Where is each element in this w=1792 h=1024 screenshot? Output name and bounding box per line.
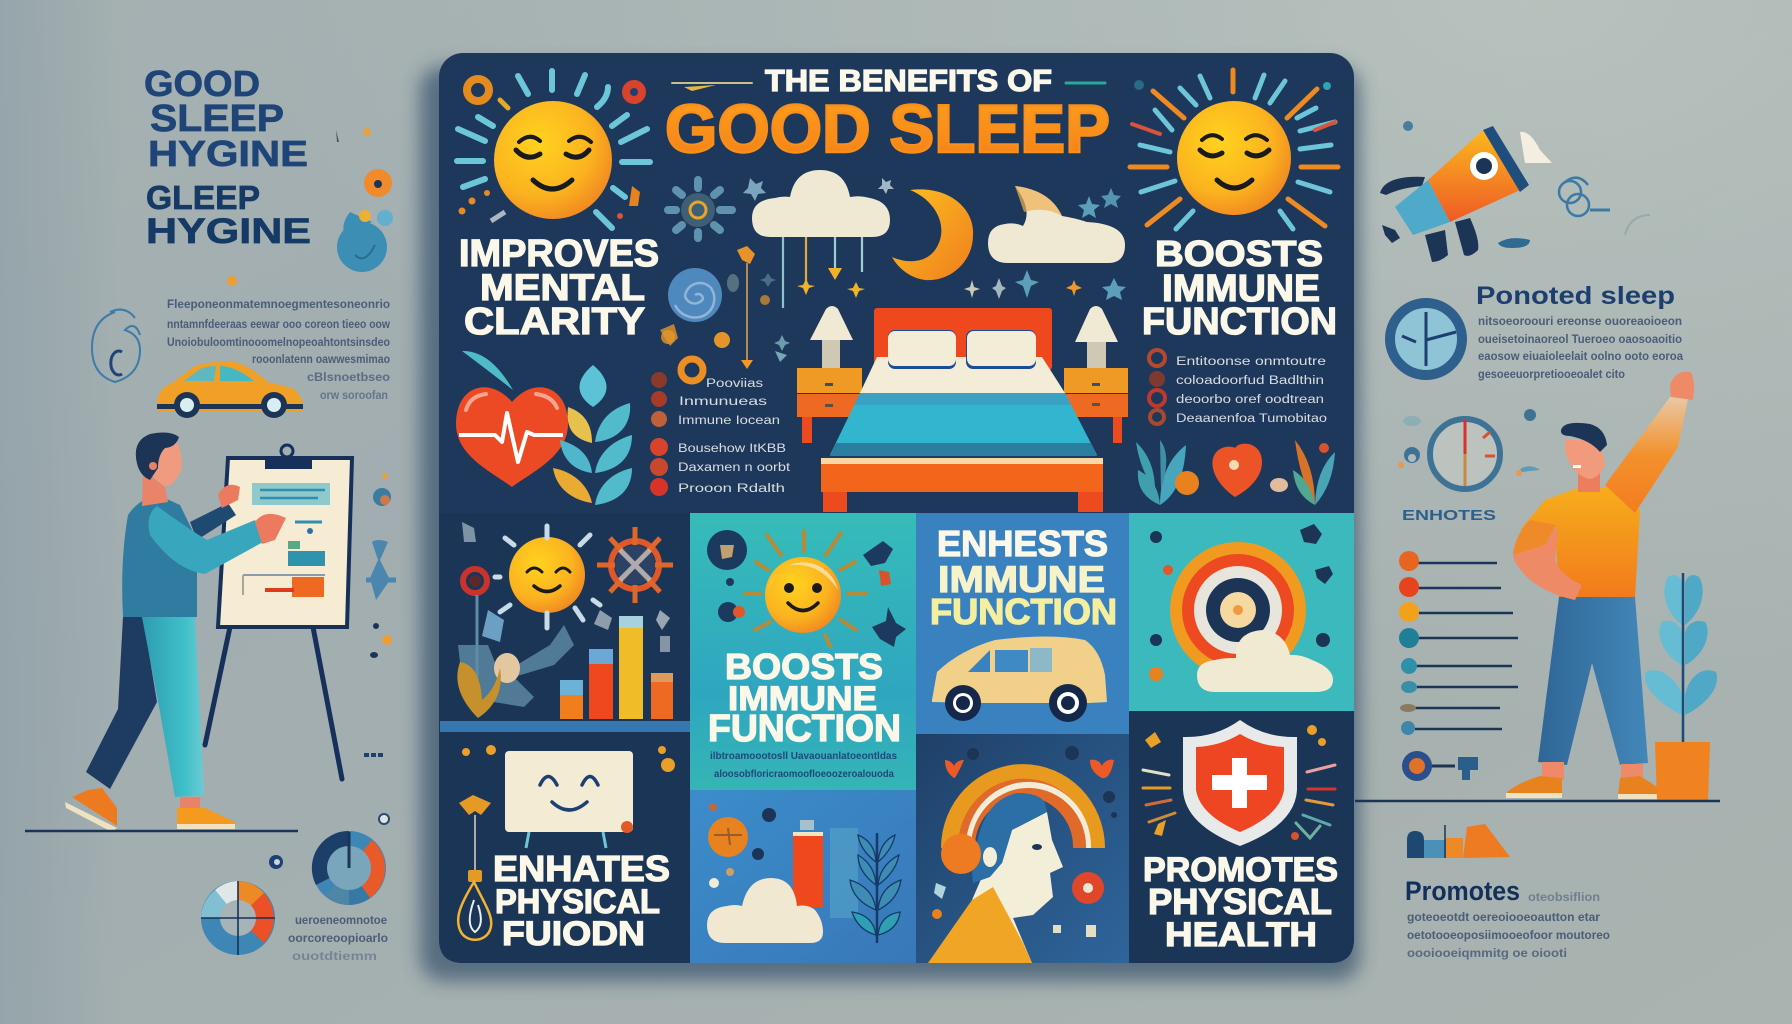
lower cell: teal boosts <box>690 513 916 790</box>
promotes text: oetotooeoposiimooeofoor moutoreo <box>1407 928 1610 942</box>
heading: boosts immune function (teal) <box>708 646 901 780</box>
scattered stars <box>743 178 894 362</box>
fern <box>850 833 901 943</box>
heading: boosts immune function (teal): BOOSTS <box>725 646 883 687</box>
heading: boosts immune function (teal): IMMUNE <box>728 680 877 718</box>
hand <box>255 514 286 544</box>
list: right bullets: Deaanenfoa Tumobitao <box>1176 413 1327 425</box>
sheet <box>860 357 1065 393</box>
hair <box>972 793 1047 883</box>
promotes text: oteobsiflion <box>1528 890 1600 904</box>
cloud <box>988 186 1125 263</box>
right body text: oueisetoinaoreol Tueroeo oaosoaoitio <box>1478 332 1682 346</box>
shelf <box>440 721 690 732</box>
headboard <box>874 308 1052 370</box>
heading: promotes physical health <box>1143 851 1338 954</box>
front leg <box>142 617 204 797</box>
bar chart <box>560 616 673 719</box>
icon: shield with cross <box>1143 720 1335 846</box>
sun: improves mental clarity <box>457 71 650 228</box>
list: right bullets: deoorbo oref oodtrean <box>1176 394 1324 406</box>
small icons by easel <box>373 473 391 506</box>
bed with nightstands <box>797 306 1128 512</box>
face <box>145 437 182 487</box>
ankles and shoes <box>1506 762 1666 799</box>
orange arrow <box>737 246 755 369</box>
heart with pulse <box>456 351 568 487</box>
lower arm <box>1513 520 1582 600</box>
lower cell: blue car <box>916 513 1129 734</box>
left pie caption: ueroeneomnotoe <box>295 913 387 927</box>
heading: boosts immune function: FUNCTION <box>1142 301 1337 343</box>
heading: improves mental clarity: MENTAL <box>480 267 645 308</box>
promotes text <box>1405 876 1610 960</box>
promotes text: oooiooeiqmmitg oe oiooti <box>1407 946 1567 960</box>
lower cell: dark left column <box>439 513 690 963</box>
sun: boosts immune function <box>1130 70 1338 229</box>
cell: smiling card <box>458 745 675 940</box>
orange badge <box>681 359 703 381</box>
pants <box>1538 597 1648 765</box>
arm <box>149 506 265 574</box>
cloud with hanging stars <box>752 170 890 308</box>
torso <box>122 496 197 617</box>
list: left bullets: Daxamen n oorbt <box>678 462 791 474</box>
left body text <box>167 297 391 402</box>
lower cell: navy shield <box>1129 711 1354 963</box>
left body text: Unoiobuloomtinooomelnopeoahtontsinsdeo <box>167 335 390 349</box>
raised arm <box>1605 397 1688 513</box>
list: left bullets: Pooviias <box>706 378 763 390</box>
heading: promotes physical health: HEALTH <box>1165 916 1317 954</box>
ear <box>983 847 997 867</box>
list: left bullets: Inmunueas <box>679 396 767 408</box>
promotes text: goteoeotdt oereoiooeoautton etar <box>1407 910 1600 924</box>
pie chart: small <box>201 881 275 955</box>
icon: target with cloud <box>1149 524 1333 692</box>
heading: improves mental clarity: IMPROVES <box>459 233 659 275</box>
orange wheel <box>597 527 673 603</box>
frame <box>821 458 1103 512</box>
lower cell: teal target <box>1129 513 1354 711</box>
heading: boosts immune function <box>1142 233 1337 343</box>
panel base <box>439 53 1354 963</box>
shirt <box>928 887 1032 963</box>
back leg <box>86 617 157 789</box>
heading: enhates physical function: ENHATES <box>493 848 670 889</box>
small red flower <box>622 80 646 104</box>
title flourishes <box>672 83 1105 91</box>
night sky scene <box>660 170 1126 369</box>
plant <box>553 365 632 505</box>
heading: boosts immune function: BOOSTS <box>1155 233 1323 274</box>
heading: enhates physical function: FUIODN <box>502 915 645 953</box>
heading: boosts immune function: IMMUNE <box>1162 268 1320 310</box>
hair <box>136 433 179 480</box>
gear icon <box>668 180 732 238</box>
left pie caption: oorcoreoopioarlo <box>288 931 388 945</box>
heading: enhests immune function: ENHESTS <box>937 523 1108 564</box>
right body text: gesoeeuorpretiooeoalet cito <box>1478 367 1625 381</box>
left body text: Fleeponeonmatemnoegmentesoneonrio <box>167 297 390 311</box>
person raising arm <box>1355 372 1720 801</box>
lower cell: profile <box>916 734 1129 963</box>
left lamp <box>810 306 853 368</box>
heading: enhates physical function: PHYSICAL <box>495 883 660 921</box>
left nightstand <box>797 368 862 443</box>
list: left bullets: Immune Iocean <box>678 415 780 427</box>
heading: enhests immune function: FUNCTION <box>930 591 1117 632</box>
list: left bullets <box>650 359 791 496</box>
arch white band <box>966 782 1091 848</box>
right clock 2 <box>1398 409 1540 489</box>
blue circle icon <box>337 210 393 272</box>
right body text: nitsoeoroouri ereonse ouoreaoioeon <box>1478 314 1682 328</box>
promotes text: Promotes <box>1405 876 1520 906</box>
list: right bullets <box>1149 350 1327 425</box>
bulb icon <box>458 795 491 940</box>
cell: smiling sun on teal <box>707 530 906 647</box>
cell: sun, wheel and bars <box>457 522 673 719</box>
heading: enhests immune function <box>930 523 1117 632</box>
torso <box>1520 487 1640 597</box>
orange ring icon <box>364 169 392 197</box>
left heading: good sleep hygine: SLEEP <box>150 98 284 140</box>
list: right bullets: coloadoorfud Badlthin <box>1176 375 1324 387</box>
decorative plants and apple <box>1136 440 1335 505</box>
small icons around sun <box>707 530 747 570</box>
heading: boosts immune function (teal): ilbtroamoootosll Uavaouanlatoeontldas <box>710 750 897 762</box>
cloud <box>707 878 823 943</box>
icon: car on blue <box>932 636 1107 722</box>
right lamp <box>1075 306 1118 368</box>
left body text: cBlsnoetbseo <box>307 370 390 384</box>
left body text: orw soroofan <box>320 388 388 402</box>
heading: enhests immune function: IMMUNE <box>938 559 1105 600</box>
icon: orange car <box>157 362 303 418</box>
list: left bullets: Bousehow ItKBB <box>678 443 786 455</box>
left pie caption <box>288 913 388 963</box>
blanket <box>830 393 1097 456</box>
heading: boosts immune function (teal): aloosobfloricraomoofloeoozeroalouoda <box>714 768 894 780</box>
botanical clutter <box>457 522 670 718</box>
left heading: good sleep hygine: HYGINE <box>146 212 311 251</box>
right body text: eaosow eiuaioleelait oolno ooto eoroa <box>1478 349 1683 363</box>
pie chart: large <box>312 831 386 905</box>
icon: profile with headphones <box>928 746 1117 963</box>
neck <box>142 470 168 506</box>
spiral icon <box>668 268 739 322</box>
right subheading: ponoted sleep: Ponoted sleep <box>1476 282 1675 310</box>
crescent moon <box>892 189 973 280</box>
right body text <box>1478 314 1683 381</box>
ground line <box>1355 800 1720 802</box>
left pie caption: ouotdtiemm <box>292 949 377 963</box>
right nightstand <box>1064 368 1128 443</box>
fist <box>1670 372 1694 400</box>
main panel <box>439 53 1354 963</box>
right caption: ENHOTES <box>1402 507 1496 524</box>
easel and clipboard <box>205 445 352 779</box>
left small icons <box>92 128 396 869</box>
pillows <box>888 330 1036 369</box>
left heading: good sleep hygine: GOOD <box>144 63 260 104</box>
panel shadow <box>420 66 1360 981</box>
smiling sun <box>495 526 600 628</box>
heading: promotes physical health: PROMOTES <box>1143 851 1338 889</box>
head <box>136 433 182 506</box>
arch knit band <box>958 779 1090 848</box>
list: right side timeline <box>1399 551 1518 781</box>
left shoe <box>65 788 117 832</box>
face and neck <box>972 812 1063 963</box>
small orange gear <box>467 79 489 101</box>
right small icons <box>1403 121 1650 248</box>
right clock 1 <box>1390 303 1462 375</box>
swirl icon <box>92 310 140 382</box>
lower cell: blue cloud <box>690 790 916 963</box>
icon: rocket megaphone <box>1380 126 1552 262</box>
title small line: THE BENEFITS OF <box>765 63 1052 98</box>
back arm <box>190 503 236 540</box>
left body text: rooonlatenn oawwesmimao <box>252 352 390 366</box>
heading: enhates physical function <box>493 848 670 953</box>
title <box>665 63 1110 167</box>
list: right bullets: Entitoonse onmtoutre <box>1176 356 1326 368</box>
heading: promotes physical health: PHYSICAL <box>1148 881 1332 922</box>
list: left bullets: Prooon Rdalth <box>678 483 785 495</box>
title large line: GOOD SLEEP <box>665 91 1110 167</box>
right shoe <box>177 797 235 829</box>
cell: cloud with red bar <box>707 803 901 943</box>
left body text: nntamnfdeeraas eewar ooo coreon tieeo oow <box>167 317 391 331</box>
arch outer <box>941 764 1105 848</box>
ground line <box>25 830 298 832</box>
heading: improves mental clarity: CLARITY <box>464 301 645 343</box>
plant and pot <box>1645 573 1717 800</box>
left heading: good sleep hygine <box>144 63 311 251</box>
small bar icon <box>1407 824 1510 858</box>
flower outline icon <box>1559 178 1610 216</box>
key icon <box>1402 751 1478 781</box>
heading: boosts immune function (teal): FUNCTION <box>708 708 901 750</box>
heading: improves mental clarity <box>459 233 659 343</box>
head <box>1561 423 1607 492</box>
left heading: good sleep hygine: HYGINE <box>148 133 308 174</box>
left heading: good sleep hygine: GLEEP <box>146 179 260 216</box>
person with clipboard <box>25 433 352 832</box>
